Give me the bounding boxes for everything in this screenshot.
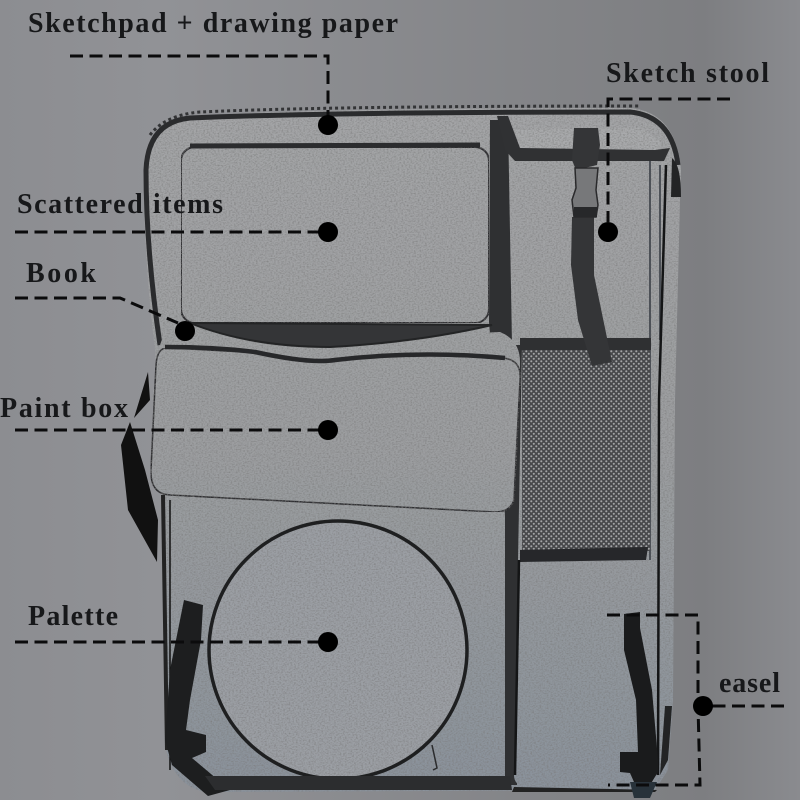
label: Scattered items: Scattered items — [17, 189, 223, 220]
palette circle — [209, 521, 467, 779]
lower seam — [169, 500, 171, 770]
roll straps — [497, 116, 670, 161]
mesh pocket — [522, 349, 650, 551]
label: Palette — [15, 601, 338, 652]
strap foot — [630, 782, 657, 798]
label: easel — [607, 615, 784, 785]
label: Sketchpad + drawing paper — [28, 8, 398, 135]
label: Palette: Palette — [28, 601, 118, 632]
right column — [497, 116, 681, 798]
buckle — [572, 168, 598, 217]
top roll — [510, 128, 661, 158]
base band — [205, 776, 512, 790]
label: Scattered items — [15, 189, 338, 242]
label: Book — [15, 258, 195, 341]
left handle strap — [165, 600, 230, 796]
lower left edge — [163, 495, 167, 750]
lower right pocket — [514, 555, 657, 787]
edge binding — [660, 706, 672, 775]
label: Paint box: Paint box — [0, 393, 128, 424]
buckle strap — [571, 128, 612, 366]
zipper teeth — [150, 106, 640, 135]
label: Paint box — [0, 393, 338, 440]
top pocket — [181, 145, 489, 323]
book pocket — [152, 323, 520, 400]
paint box pocket — [151, 347, 520, 512]
label: Sketchpad + drawing paper: Sketchpad + drawing paper — [28, 8, 398, 39]
right seam — [658, 165, 666, 775]
easel strap — [620, 612, 658, 785]
label: Sketch stool: Sketch stool — [606, 58, 769, 89]
side strap — [121, 372, 158, 562]
corner binding — [671, 158, 681, 197]
bag body — [144, 108, 681, 792]
zipper edge — [146, 112, 678, 345]
label: Book: Book — [26, 258, 96, 289]
stool pocket shading — [650, 160, 660, 560]
dark gap between columns — [489, 120, 522, 785]
label: easel: easel — [719, 668, 780, 699]
label: Sketch stool — [598, 58, 769, 242]
bag — [121, 106, 681, 798]
